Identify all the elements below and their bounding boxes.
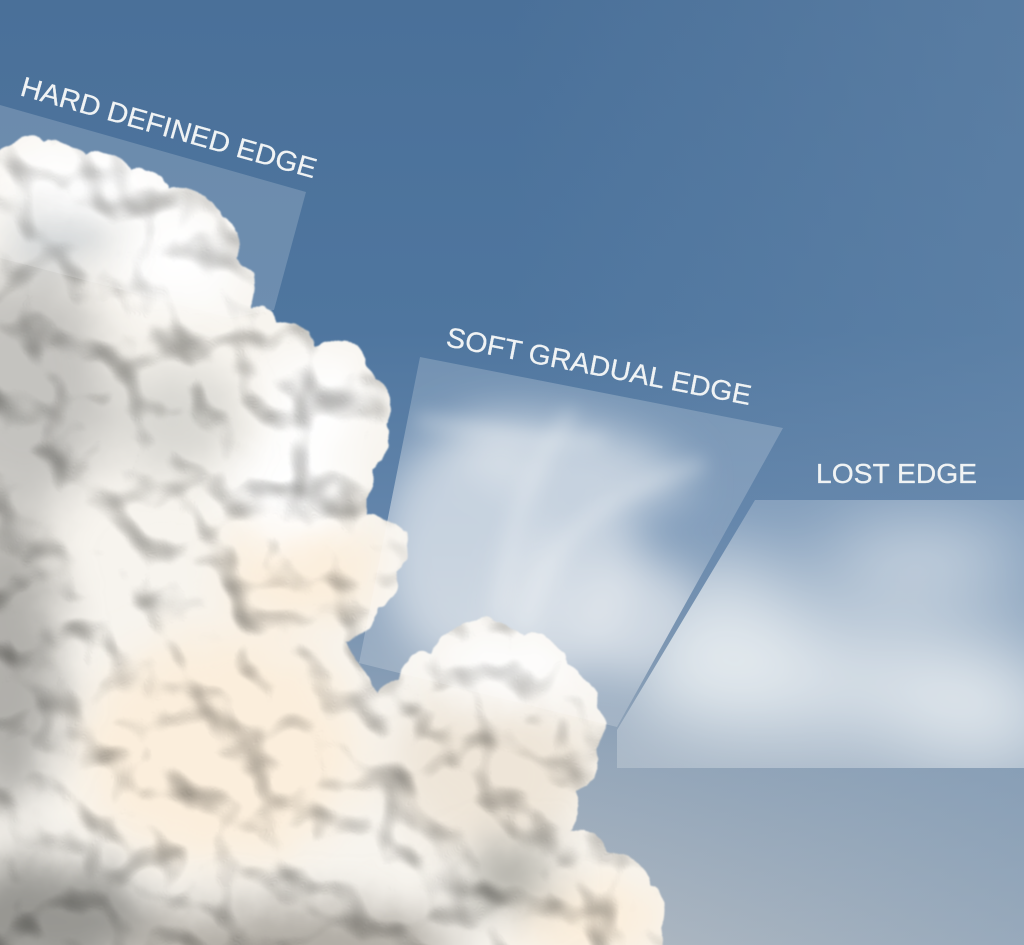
panel: hard defined edge xyxy=(0,105,306,318)
label: lost edge: LOST EDGE xyxy=(816,458,977,489)
bright highlights xyxy=(0,140,580,700)
panel: soft gradual edge xyxy=(359,357,783,727)
grey shadow masses xyxy=(0,220,555,945)
sky wisps: lost edge xyxy=(620,525,1024,770)
label: hard defined edge: HARD DEFINED EDGE xyxy=(17,71,320,184)
warm lit lower cloud xyxy=(80,510,670,945)
label: soft gradual edge: SOFT GRADUAL EDGE xyxy=(444,321,754,411)
cumulus cloud xyxy=(0,138,670,945)
sky wisps: soft gradual edge xyxy=(380,396,710,706)
panel: lost edge xyxy=(617,500,1024,768)
